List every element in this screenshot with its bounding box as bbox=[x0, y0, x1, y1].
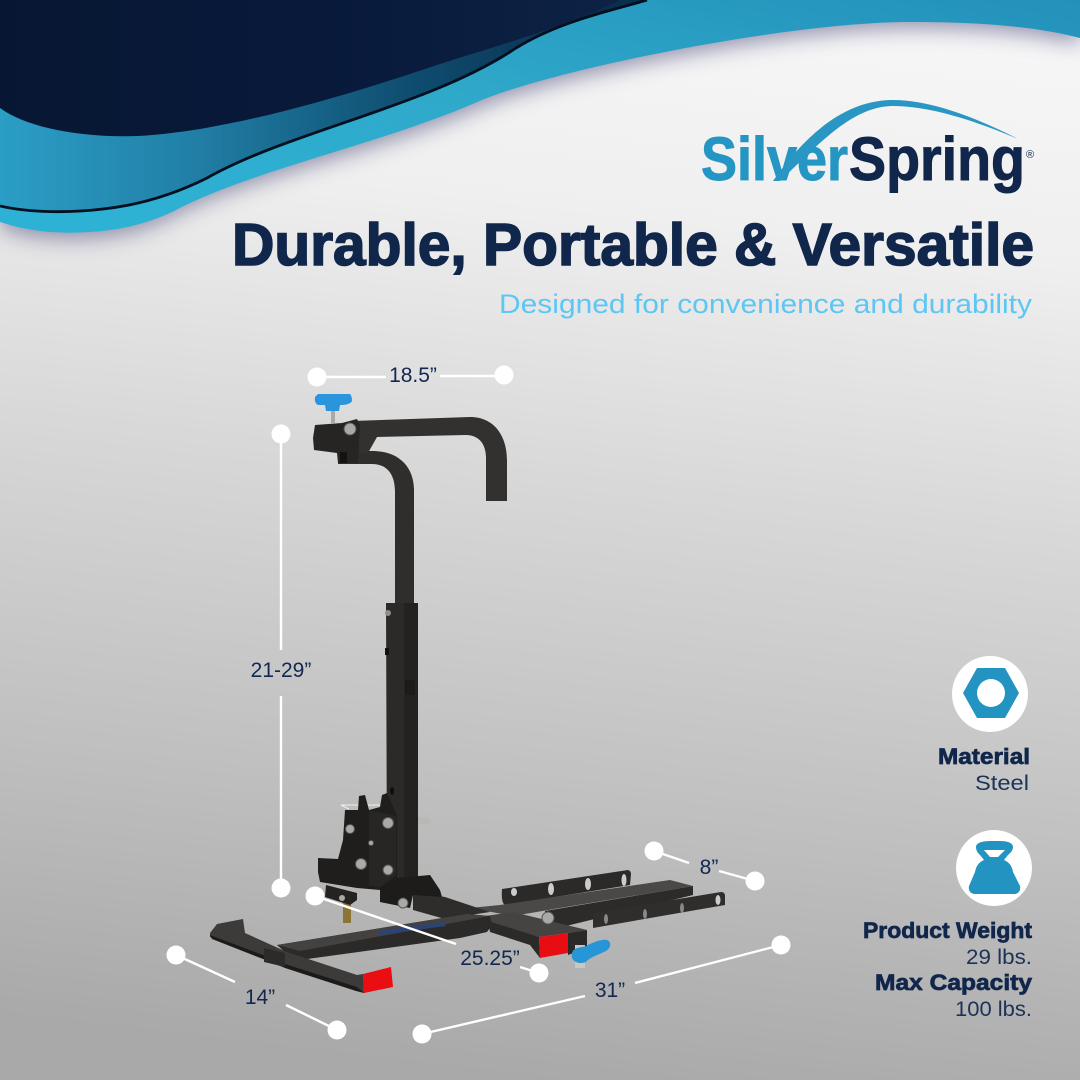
pivot plate bbox=[318, 793, 397, 890]
material spec bbox=[938, 744, 1030, 795]
subtitle: Designed for convenience and durability bbox=[499, 289, 1033, 319]
pin ring bbox=[341, 805, 380, 809]
dimension: 31 inches bbox=[412, 936, 790, 1044]
dimension: 14 inches: 14” bbox=[245, 986, 275, 1009]
material spec: Material bbox=[938, 744, 1030, 769]
side pins bbox=[416, 817, 431, 870]
top arm bbox=[352, 417, 507, 501]
dimension: 25.25 inches bbox=[306, 886, 548, 982]
title: Durable, Portable & Versatile bbox=[232, 212, 1034, 278]
right side tube bbox=[470, 880, 693, 927]
icon: steel hex nut bbox=[952, 656, 1028, 732]
front cross bar bbox=[210, 919, 364, 993]
red end cap right bbox=[539, 933, 568, 958]
brass pin bbox=[343, 903, 351, 923]
clamp head bbox=[313, 419, 360, 463]
dimension: 18.5 inches bbox=[308, 364, 514, 387]
dimension: 8 inches bbox=[644, 842, 764, 890]
weight and capacity spec: Max Capacity bbox=[875, 970, 1033, 995]
logo swoosh arc bbox=[773, 100, 1018, 181]
dimension: 31 inches: 31” bbox=[595, 979, 625, 1002]
blue top knob bbox=[315, 394, 352, 423]
weight and capacity spec: 29 lbs. bbox=[966, 946, 1032, 969]
dimension: 18.5 inches: 18.5” bbox=[389, 364, 437, 387]
weight and capacity spec: 100 lbs. bbox=[955, 998, 1032, 1021]
front mounting plate bbox=[593, 892, 725, 928]
logo word Silver: Silver bbox=[701, 125, 848, 193]
product: scooter carrier lift bbox=[210, 394, 725, 993]
long base bar bbox=[277, 914, 492, 960]
upper post bbox=[338, 451, 414, 603]
blue wing knob base bbox=[572, 940, 610, 968]
registered mark: ® bbox=[1026, 149, 1034, 161]
lower bracket bbox=[380, 875, 554, 924]
SilverSpring logo bbox=[701, 100, 1034, 193]
cross arm to red cap bbox=[485, 912, 587, 958]
dimension: 25.25 inches: 25.25” bbox=[460, 947, 520, 970]
upright sleeve bbox=[385, 603, 418, 880]
icon: kettlebell weight bbox=[956, 830, 1032, 906]
arm from bracket to cross bbox=[413, 892, 490, 919]
red end cap left bbox=[363, 967, 393, 993]
lower clamp bbox=[325, 885, 357, 905]
rear mounting plate bbox=[502, 870, 631, 905]
weight and capacity spec bbox=[863, 918, 1033, 1021]
dimension: 21-29 inches bbox=[251, 424, 311, 898]
dimension: 8 inches: 8” bbox=[700, 856, 718, 879]
bar collar bbox=[264, 948, 285, 967]
sticker on bar bbox=[378, 922, 446, 935]
weight and capacity spec: Product Weight bbox=[863, 918, 1033, 943]
header wave graphic bbox=[0, 0, 1080, 239]
material spec: Steel bbox=[975, 772, 1029, 795]
dimension: 14 inches bbox=[166, 946, 346, 1040]
dimension: 21-29 inches: 21-29” bbox=[251, 659, 311, 682]
logo word Spring: Spring bbox=[849, 125, 1025, 193]
